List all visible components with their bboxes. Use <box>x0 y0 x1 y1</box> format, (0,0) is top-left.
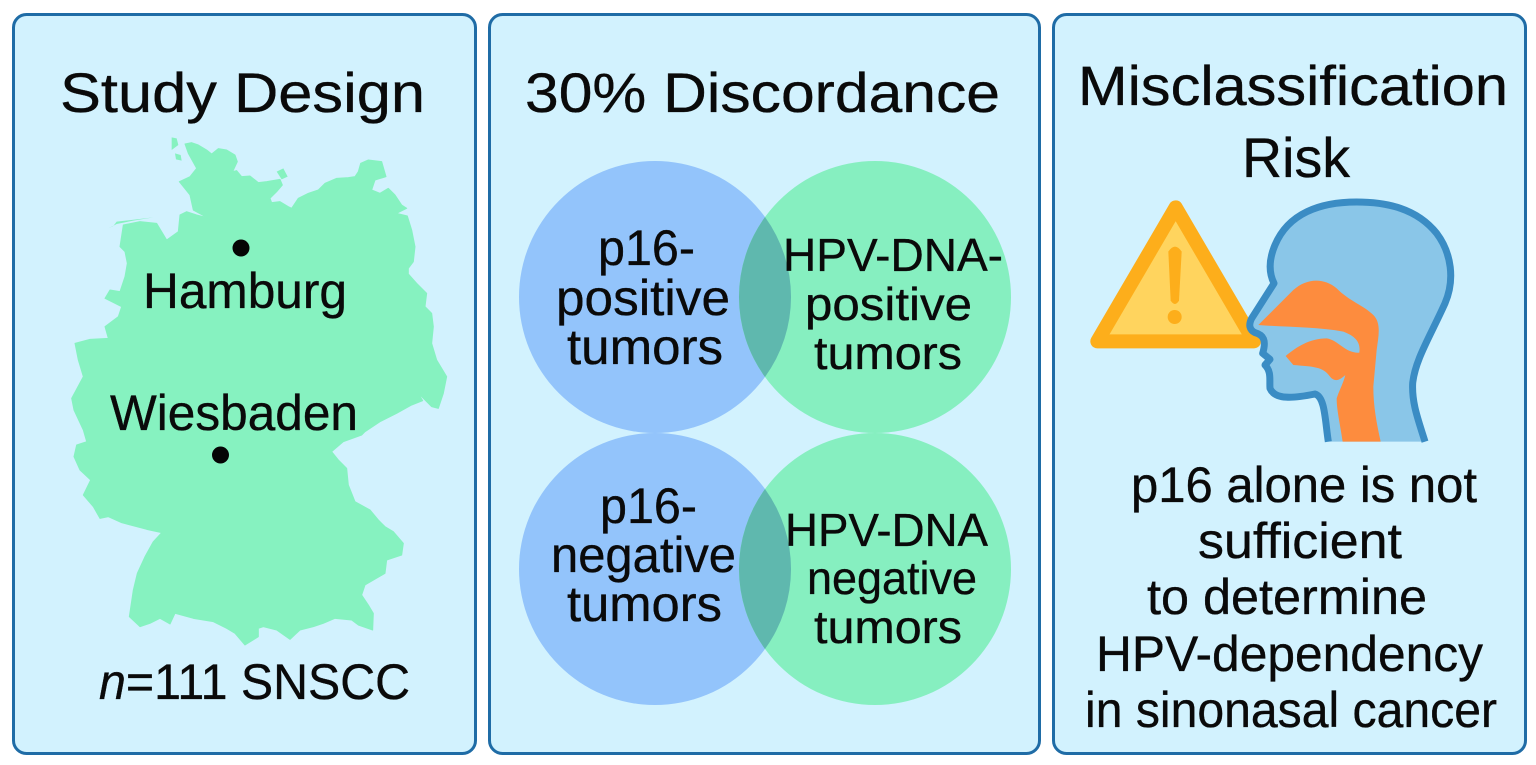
text: conclusion: p16 alone is not <box>1131 457 1477 513</box>
map: Germany <box>72 137 447 645</box>
panel: discordance <box>490 14 1040 754</box>
icon: head cross-section <box>1250 202 1451 442</box>
panel: study design <box>14 14 476 754</box>
icon: warning triangle <box>1097 207 1254 341</box>
label: p16-positive: tumors <box>567 319 723 375</box>
heading: misclassification risk: Risk <box>1242 126 1351 189</box>
marker: Hamburg <box>232 240 250 256</box>
label: p16-positive: positive <box>556 270 730 326</box>
marker: Wiesbaden <box>212 446 229 464</box>
text: conclusion <box>1085 457 1497 738</box>
text: conclusion: sufficient <box>1198 513 1402 569</box>
text: conclusion: HPV-dependency <box>1096 626 1483 682</box>
heading: misclassification risk <box>1078 54 1508 189</box>
label: Wiesbaden: Wiesbaden <box>110 385 358 441</box>
text: conclusion: to determine <box>1147 569 1427 625</box>
label: HPV-DNA-negative <box>785 504 988 653</box>
venn: positive tumors <box>519 161 1011 433</box>
label: p16-positive <box>556 220 730 375</box>
sample size: n=111 SNSCC <box>99 654 410 710</box>
label: Hamburg: Hamburg <box>143 263 347 319</box>
label: p16-negative: p16- <box>600 478 697 534</box>
label: p16-positive: p16- <box>598 220 695 276</box>
heading: study design: Study Design <box>60 61 425 124</box>
heading: misclassification risk: Misclassification <box>1078 54 1508 117</box>
heading: 30% discordance: 30% Discordance <box>525 61 1000 124</box>
label: HPV-DNA-negative: HPV-DNA <box>785 504 988 556</box>
label: p16-negative: tumors <box>567 576 722 632</box>
label: p16-negative: negative <box>551 527 736 583</box>
label: HPV-DNA-negative: negative <box>807 552 977 604</box>
label: HPV-DNA-negative: tumors <box>814 601 962 653</box>
panel: misclassification risk <box>1054 14 1526 754</box>
text: conclusion: in sinonasal cancer <box>1085 682 1497 738</box>
label: HPV-DNA-positive: positive <box>805 278 972 330</box>
label: HPV-DNA-positive: tumors <box>814 327 962 379</box>
venn: negative tumors <box>519 433 1011 705</box>
label: HPV-DNA-positive <box>783 229 1003 379</box>
label: HPV-DNA-positive: HPV-DNA- <box>783 229 1003 281</box>
label: p16-negative <box>551 478 736 632</box>
